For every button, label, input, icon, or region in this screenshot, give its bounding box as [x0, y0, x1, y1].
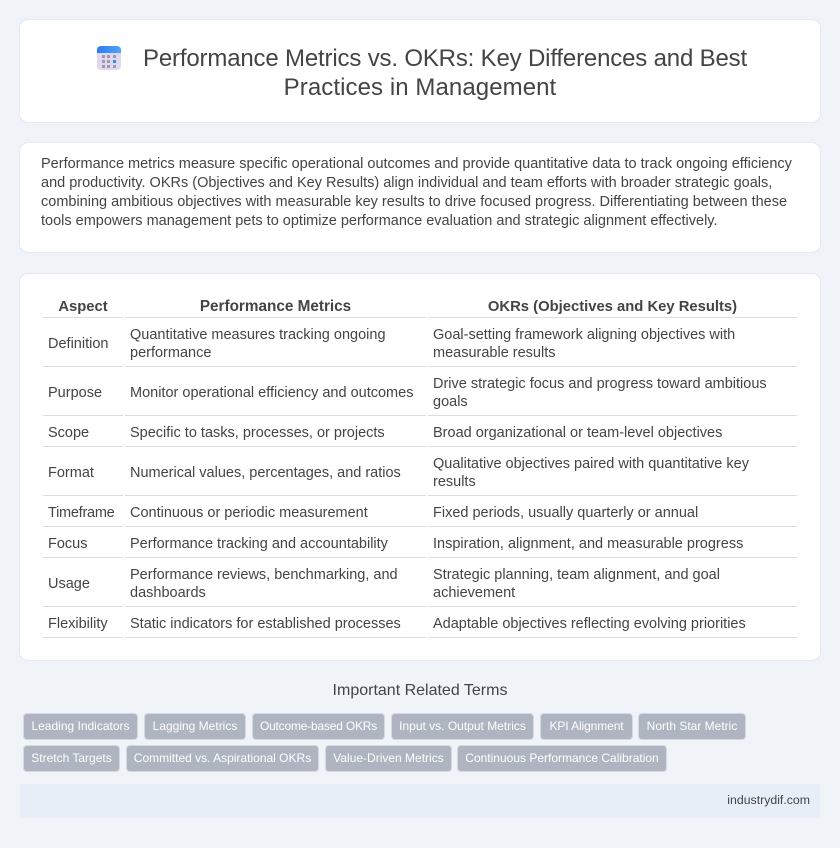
comparison table: dashboards: [130, 584, 206, 600]
tag: Value-Driven Metrics: [333, 751, 444, 765]
comparison table: Timeframe: [48, 504, 114, 520]
comparison table: Flexibility: [48, 616, 108, 632]
comparison table: Usage: [48, 576, 90, 592]
tag: KPI Alignment: [549, 719, 624, 733]
intro card: [20, 143, 820, 252]
comparison table: Broad organizational or team-level objectives: [433, 424, 722, 440]
comparison table: OKRs (Objectives and Key Results): [488, 298, 737, 314]
comparison table: goals: [433, 394, 468, 410]
comparison table: results: [433, 474, 476, 490]
comparison table: Adaptable objectives reflecting evolving priorities: [433, 616, 746, 632]
comparison table: Qualitative objectives paired with quantitative key: [433, 456, 749, 472]
title: Performance Metrics vs. OKRs: Key Differences and Best: [143, 45, 747, 72]
tag: [639, 714, 745, 739]
icon: calendar grid: [97, 46, 121, 70]
tag: [541, 714, 632, 739]
comparison table: Performance Metrics: [200, 298, 351, 314]
tag: Lagging Metrics: [153, 719, 237, 733]
comparison table: Continuous or periodic measurement: [130, 504, 368, 520]
comparison table: measurable results: [433, 344, 556, 360]
comparison table: Quantitative measures tracking ongoing: [130, 326, 386, 342]
comparison table card: [20, 274, 820, 660]
comparison table: Goal-setting framework aligning objectives with: [433, 326, 735, 342]
comparison table: Specific to tasks, processes, or projects: [130, 424, 385, 440]
comparison table: Performance tracking and accountability: [130, 536, 388, 552]
tag: Outcome-based OKRs: [260, 719, 377, 733]
tag: [392, 714, 533, 739]
title: Practices in Management: [284, 74, 556, 101]
intro text: [41, 156, 792, 229]
comparison table: Format: [48, 464, 94, 480]
comparison table: Numerical values, percentages, and ratios: [130, 464, 401, 480]
footer bar: [20, 784, 820, 818]
tag: [326, 746, 451, 771]
comparison table: Static indicators for established processes: [130, 616, 401, 632]
tag: Input vs. Output Metrics: [399, 719, 526, 733]
intro text: and productivity. OKRs (Objectives and Key Results) align individual and team efforts with broader strategic goals,: [41, 175, 772, 191]
header card: [20, 20, 820, 122]
comparison table: Inspiration, alignment, and measurable progress: [433, 536, 743, 552]
comparison table: Monitor operational efficiency and outcomes: [130, 384, 413, 400]
related terms tags: [23, 713, 746, 772]
intro text: tools empowers management pets to optimize performance evaluation and strategic alignment effectively.: [41, 213, 718, 229]
tag: [253, 714, 384, 739]
comparison table: [43, 298, 797, 638]
comparison table: Focus: [48, 536, 88, 552]
comparison table: Performance reviews, benchmarking, and: [130, 566, 398, 582]
footer source: industrydif.com: [727, 793, 810, 807]
comparison table: Drive strategic focus and progress toward ambitious: [433, 376, 767, 392]
title: [143, 45, 747, 101]
related terms heading: Important Related Terms: [333, 682, 507, 699]
comparison table: Fixed periods, usually quarterly or annual: [433, 504, 698, 520]
tag: Continuous Performance Calibration: [465, 751, 659, 765]
comparison table: Scope: [48, 424, 89, 440]
comparison table: performance: [130, 344, 211, 360]
tag: [24, 746, 119, 771]
comparison table: Purpose: [48, 384, 102, 400]
tag: Stretch Targets: [31, 751, 112, 765]
tag: [24, 714, 137, 739]
tag: [145, 714, 245, 739]
comparison table: Strategic planning, team alignment, and goal: [433, 566, 720, 582]
tag: Committed vs. Aspirational OKRs: [134, 751, 311, 765]
tag: [458, 746, 666, 771]
tag: Leading Indicators: [31, 719, 130, 733]
comparison table: achievement: [433, 584, 515, 600]
comparison table: Aspect: [58, 298, 108, 314]
tag: North Star Metric: [647, 719, 737, 733]
tag: [127, 746, 318, 771]
comparison table: Definition: [48, 336, 108, 352]
intro text: combining ambitious objectives with measurable key results to drive focused progress. Differentiating between these: [41, 194, 787, 210]
intro text: Performance metrics measure specific operational outcomes and provide quantitative data to track ongoing efficiency: [41, 156, 792, 172]
